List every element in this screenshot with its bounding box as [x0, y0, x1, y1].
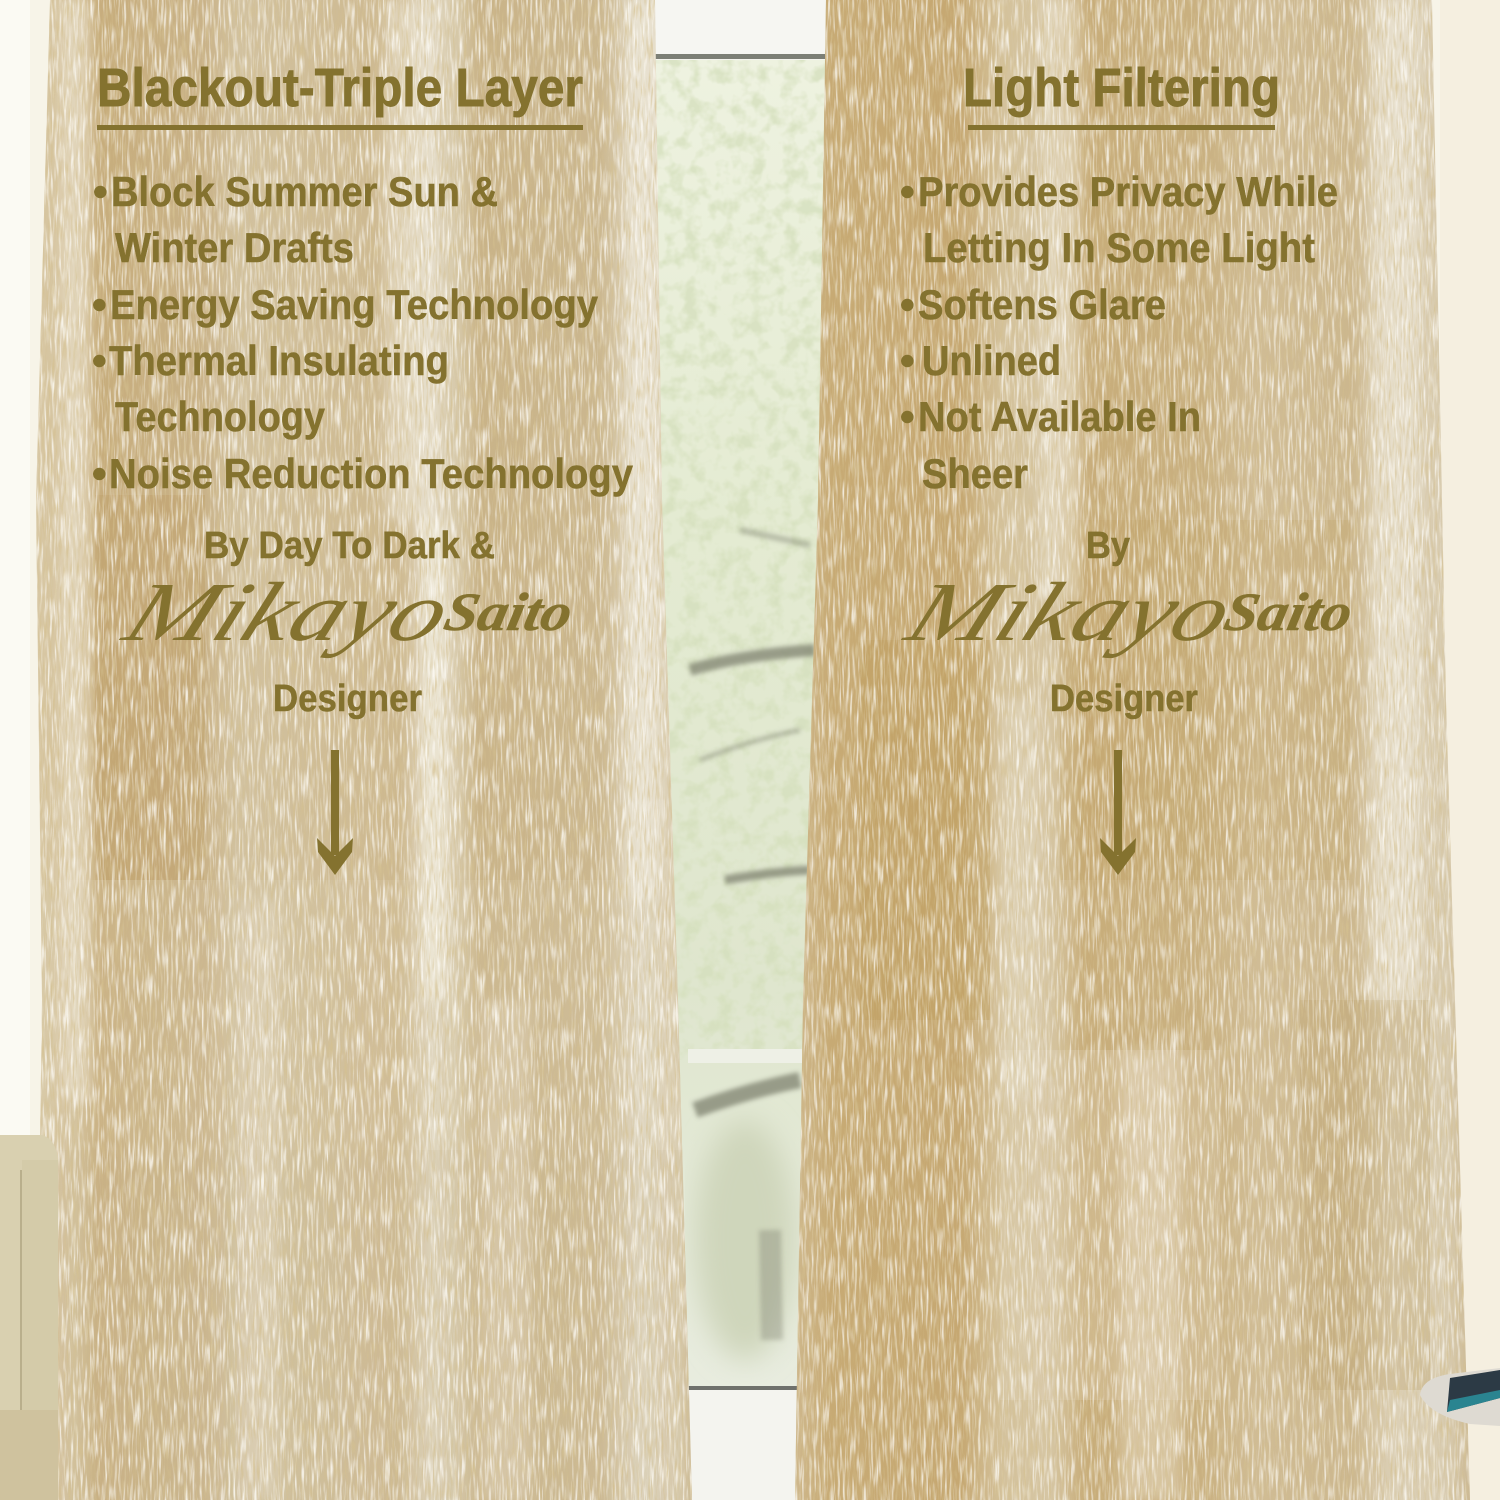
designer label: Designer [1050, 678, 1198, 720]
bullet list: light filtering features: • [900, 281, 915, 328]
bullet list: light filtering features: Unlined [922, 337, 1061, 384]
window frame rails [655, 0, 825, 54]
side table with book [1420, 1368, 1500, 1426]
window with tree view [640, 0, 840, 1500]
tree foliage [655, 60, 825, 1360]
bullet list: light filtering features: • [900, 168, 915, 215]
bullet list: blackout features: • [92, 450, 107, 497]
bullet list: light filtering features: Provides Privacy While [918, 168, 1338, 215]
signature: Mikayo Saito: Mikayo [892, 565, 1247, 658]
sofa arm [0, 1135, 58, 1500]
signature: Mikayo Saito [892, 565, 1358, 658]
tree branches [690, 530, 815, 1340]
heading: blackout triple layer: Blackout-Triple Layer [97, 58, 583, 118]
byline: By Day To Dark & [204, 525, 495, 567]
bullet list: blackout features: • [92, 281, 107, 328]
bullet list: light filtering features: Not Available In [918, 393, 1201, 440]
bullet list: light filtering features: • [900, 337, 915, 384]
signature: Mikayo Saito: Saito [439, 582, 578, 642]
panel: light filtering text [892, 58, 1358, 875]
bullet list: light filtering features [900, 168, 1338, 497]
bullet list: light filtering features: Letting In Some Light [923, 224, 1315, 271]
bullet list: blackout features: Winter Drafts [115, 224, 354, 271]
bullet list: blackout features: Thermal Insulating [109, 337, 449, 384]
bullet list: light filtering features: • [900, 393, 915, 440]
bullet list: blackout features: • [93, 168, 108, 215]
bullet list: blackout features [92, 168, 634, 497]
bullet list: blackout features: Block Summer Sun & [111, 168, 498, 215]
right curtain [790, 0, 1475, 1500]
panel: blackout triple layer text [92, 58, 634, 875]
bullet list: blackout features: Noise Reduction Technology [109, 450, 634, 497]
bullet list: blackout features: Energy Saving Technology [110, 281, 599, 328]
bullet list: blackout features: Technology [115, 393, 326, 440]
arrow: down [1100, 750, 1136, 875]
signature: Mikayo Saito: Mikayo [110, 565, 465, 658]
bullet list: light filtering features: Sheer [922, 450, 1028, 497]
heading: light filtering: Light Filtering [963, 58, 1280, 118]
signature: Mikayo Saito: Saito [1219, 582, 1358, 642]
left curtain [30, 0, 700, 1500]
arrow: down [317, 750, 353, 875]
bullet list: light filtering features: Softens Glare [918, 281, 1166, 328]
bullet list: blackout features: • [92, 337, 107, 384]
designer label: Designer [273, 678, 422, 720]
signature: Mikayo Saito [110, 565, 578, 658]
byline: By [1086, 525, 1130, 567]
